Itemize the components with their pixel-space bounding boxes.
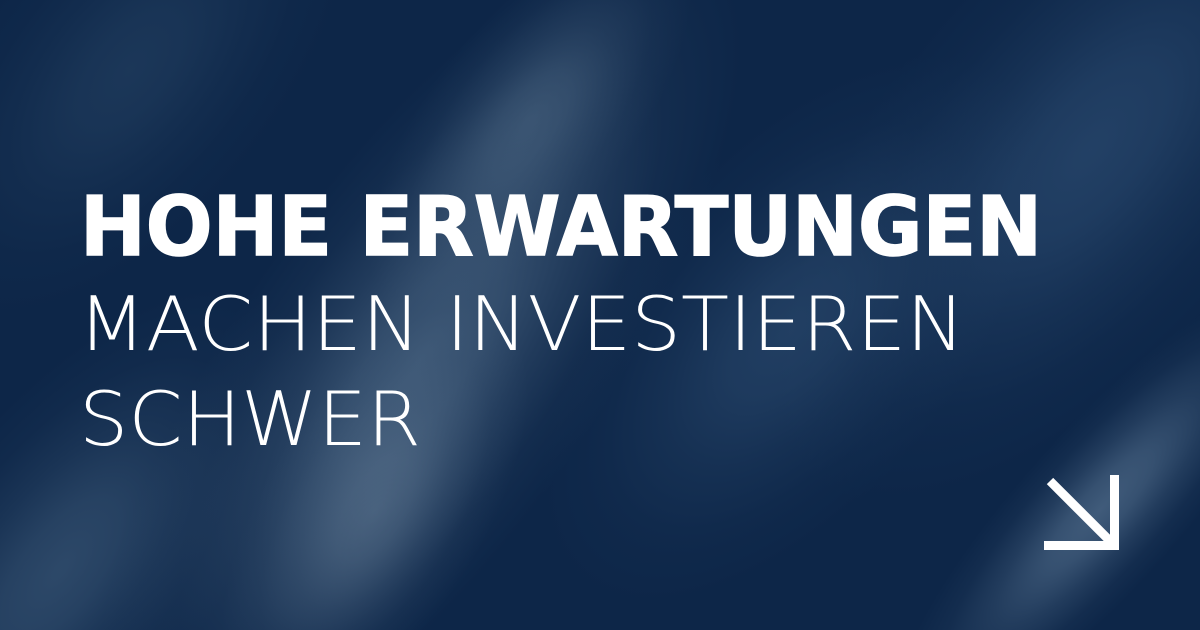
title line 3: light: SCHWER [79, 375, 421, 463]
icon: arrow pointing down-right [1044, 475, 1114, 546]
title line 2: light: MACHEN INVESTIEREN [78, 280, 965, 368]
title [78, 180, 1042, 463]
title line 1: bold: HOHE ERWARTUNGEN [80, 180, 1042, 275]
